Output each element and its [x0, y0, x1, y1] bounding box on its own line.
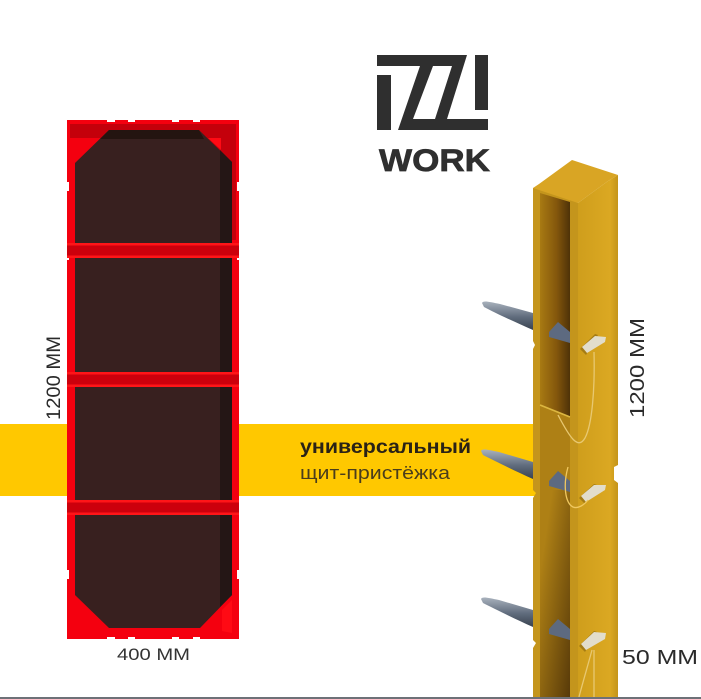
clamp shadow — [579, 631, 597, 652]
band text — [300, 437, 471, 483]
wedge pin 1 — [482, 301, 606, 355]
post front flange — [533, 188, 578, 697]
yellow post — [533, 160, 618, 697]
band title: универсальный — [300, 437, 471, 458]
post channel upper — [540, 193, 570, 417]
clamp — [581, 485, 606, 502]
post top — [533, 160, 618, 203]
bottom edge line — [0, 697, 701, 699]
logo word: WORK — [379, 142, 490, 178]
pin blade — [481, 597, 533, 627]
red frame — [67, 120, 239, 639]
post channel lower shade — [540, 490, 570, 697]
yellow band — [0, 424, 536, 496]
pin blade — [482, 301, 533, 330]
pin blade — [481, 449, 533, 479]
bright corners — [208, 138, 232, 633]
clamp — [582, 336, 606, 353]
post right face — [578, 175, 618, 697]
logo mark — [377, 55, 488, 130]
panel top shadow — [100, 130, 204, 139]
label: post width: 50 MM — [622, 647, 698, 669]
band subtitle: щит-пристёжка — [300, 462, 451, 483]
pin body — [549, 619, 570, 640]
logo: IZZI WORK — [377, 55, 490, 178]
ribs — [67, 244, 239, 515]
label: panel height: 1200 MM — [44, 336, 65, 420]
post channel lower — [540, 405, 570, 697]
red formwork panel — [67, 120, 239, 639]
cords — [558, 352, 594, 697]
pin body — [549, 322, 570, 343]
wedge pin 3 — [481, 597, 606, 652]
wedge pin 2 — [481, 449, 606, 504]
clamp shadow — [579, 484, 597, 504]
clamp shadow — [580, 334, 598, 355]
label: panel width: 400 MM — [117, 645, 190, 664]
clamp — [581, 632, 606, 650]
rib highlights — [67, 243, 239, 515]
frame inner shade — [70, 124, 236, 240]
pin body — [549, 471, 570, 492]
panel right shadow — [220, 150, 232, 607]
plywood sections — [75, 130, 232, 628]
label: post height: 1200 MM — [627, 318, 649, 418]
channel divider — [540, 405, 570, 417]
frame notches — [67, 120, 239, 639]
